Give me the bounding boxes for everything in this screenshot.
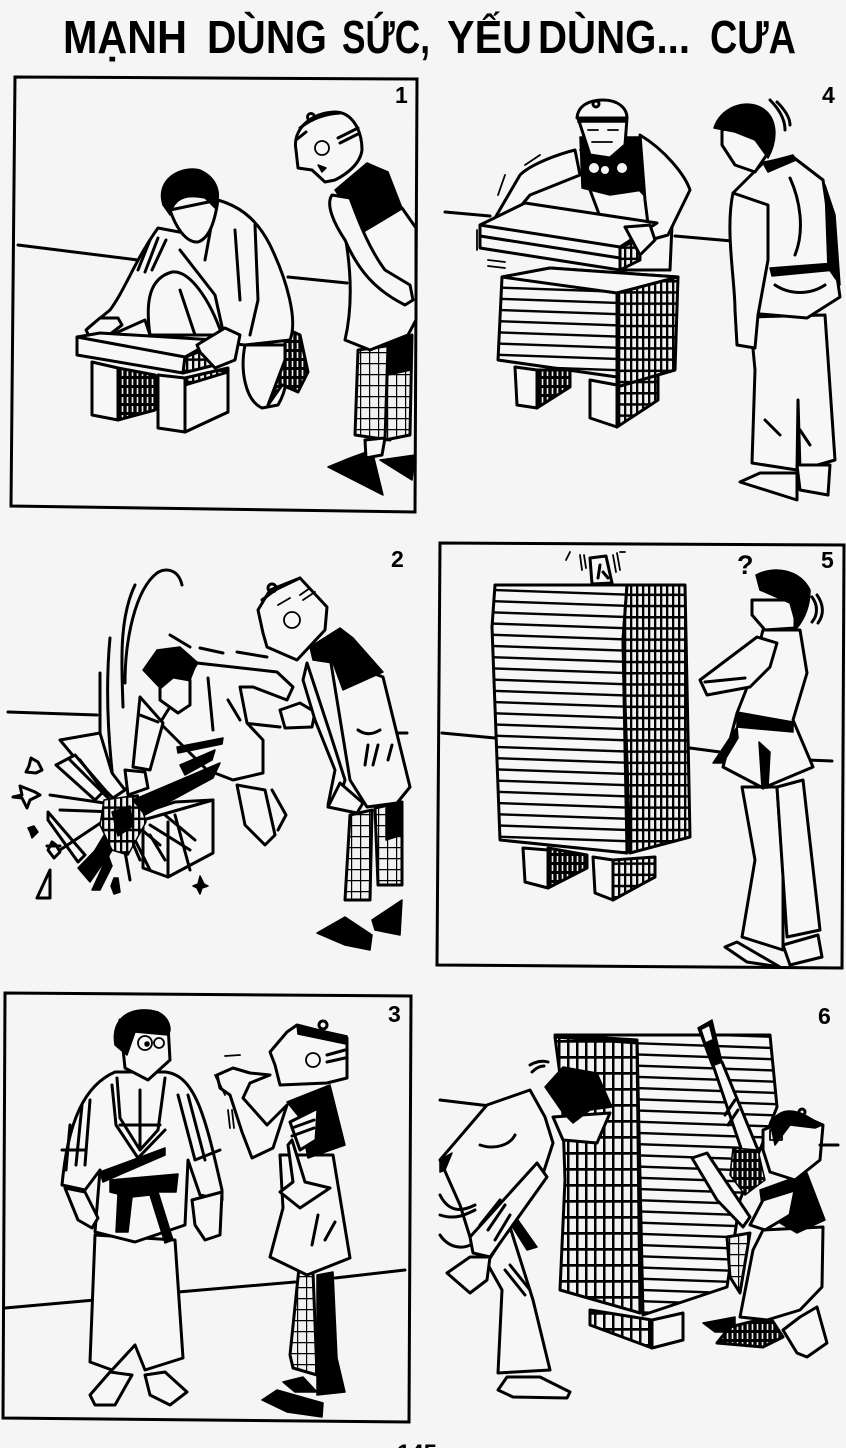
- title: DÙNG: [207, 11, 327, 63]
- panel number 4: 4: [822, 82, 835, 108]
- big man in martial arts uniform: [62, 1010, 222, 1405]
- board on two blocks: [77, 328, 240, 432]
- panel 3: master points to himself: [3, 993, 411, 1422]
- kneeling man: [86, 169, 308, 408]
- small figure on top with sparks: [566, 552, 625, 584]
- title: YẾU: [447, 11, 532, 63]
- leaning stack of boards: [555, 1035, 777, 1348]
- tall stack of boards: [492, 585, 690, 900]
- master lifting the top board: [477, 100, 690, 270]
- flying splinters: [100, 570, 182, 780]
- stars and debris: [13, 758, 208, 898]
- panel number 5: 5: [821, 547, 834, 573]
- stack of boards on blocks: [498, 268, 678, 427]
- saw: [698, 1020, 758, 1160]
- old master watching: [295, 112, 416, 495]
- panel 6: master saws the stack: [440, 1003, 838, 1398]
- panel 4: stacked boards: [445, 82, 840, 500]
- old master pointing thumb at himself: [215, 1021, 350, 1417]
- title: CƯA: [710, 11, 796, 63]
- shattered board and block: [48, 733, 213, 894]
- panel number 2: 2: [391, 546, 404, 572]
- crouching man striking: [125, 635, 315, 845]
- panel 5: huge stack of boards: [437, 543, 844, 968]
- panel number 3: 3: [388, 1001, 401, 1027]
- man with crossed arms: [700, 570, 822, 967]
- panel 2: the strike smashes the board: [8, 546, 410, 950]
- title: SỨC,: [342, 11, 430, 63]
- big man looking: [714, 100, 840, 500]
- old master bending: [258, 578, 410, 950]
- title: MẠNH: [63, 11, 187, 63]
- title: DÙNG...: [538, 11, 690, 63]
- small master pressing hands: [692, 1109, 838, 1357]
- panel number 6: 6: [818, 1003, 831, 1029]
- panel 1: man prepares to break a board: [11, 77, 417, 512]
- question mark: ?: [737, 550, 754, 580]
- man bending and peering: [440, 1061, 612, 1398]
- panel number 1: 1: [395, 82, 408, 108]
